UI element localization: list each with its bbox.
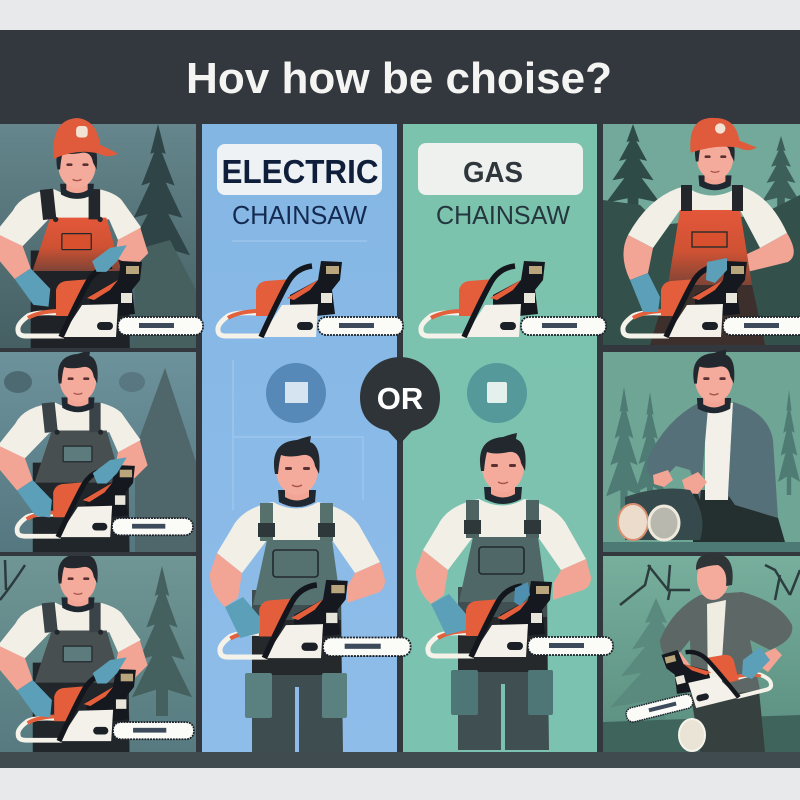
icon: chainsaw <box>220 580 411 658</box>
icon: bare branches <box>620 565 800 605</box>
worker figure <box>0 152 148 348</box>
icon: dark ground <box>603 715 800 752</box>
icon: chainsaw, left middle <box>17 465 193 537</box>
panel: man in sweater with chainsaw <box>603 553 800 752</box>
icon: bare branches <box>0 560 25 600</box>
label: gas: GAS <box>463 157 523 189</box>
panel: worker with cap, top left <box>0 118 196 348</box>
title: Hov how be choise? <box>186 54 612 103</box>
panel: electric column <box>202 124 397 752</box>
subheading: electric chainsaw: CHAINSAW <box>232 200 367 230</box>
faint guide lines: electric <box>232 241 367 510</box>
icon: background trees <box>606 387 800 512</box>
icon: chainsaw, flipped <box>614 630 772 725</box>
icon: gloves, top left worker <box>15 245 127 307</box>
icon: cap <box>53 118 118 159</box>
icon: gloves <box>225 597 260 638</box>
icon: dark ground <box>603 195 800 345</box>
panel: man in suit with logs <box>603 349 800 552</box>
icon: chainsaw, electric column <box>218 261 403 337</box>
icon: gloves, left bottom worker <box>17 657 127 717</box>
worker figure <box>0 556 148 752</box>
icon: chainsaw, top right <box>623 261 800 337</box>
icon: electric circle <box>266 363 326 423</box>
icon: background tree <box>132 566 192 716</box>
icon: chainsaw <box>428 581 613 657</box>
icon: lower background <box>135 240 196 348</box>
icon: logs <box>618 489 702 540</box>
icon: cap <box>690 118 757 153</box>
icon: stump <box>679 719 705 751</box>
icon: chainsaw, gas column <box>421 261 606 337</box>
panel: gas column <box>403 124 597 752</box>
icon: gas circle <box>467 363 527 423</box>
icon: background tree <box>126 124 190 274</box>
icon: chainsaw, top left <box>18 261 203 337</box>
icon: glove <box>742 647 770 679</box>
icon: gloves, left middle worker <box>17 457 127 517</box>
panel: worker with cap, top right <box>603 118 800 345</box>
panel: worker, left bottom <box>0 556 196 752</box>
icon: background tree <box>762 136 800 211</box>
label: gas <box>418 143 583 195</box>
panel: worker, left middle <box>0 352 196 552</box>
icon: background fir <box>610 598 702 723</box>
electric worker with chainsaw <box>210 436 411 753</box>
icon: chainsaw, left bottom <box>18 669 194 741</box>
worker figure <box>0 352 148 552</box>
worker figure <box>623 128 794 345</box>
icon: smudge <box>4 371 32 393</box>
icon: gloves <box>431 594 466 635</box>
man in sweater <box>660 553 792 752</box>
icon: smudge <box>119 372 145 392</box>
label: electric <box>217 144 382 195</box>
badge: OR <box>360 357 440 444</box>
subheading: gas chainsaw: CHAINSAW <box>436 200 570 230</box>
badge: OR: OR <box>377 381 423 416</box>
icon: gloves, top right worker <box>630 258 727 312</box>
icon: background tree <box>606 124 660 214</box>
bottom strip <box>0 752 800 768</box>
icon: background fir <box>135 368 196 552</box>
label: electric: ELECTRIC <box>222 153 378 190</box>
man in suit <box>647 349 785 542</box>
icon: right glove <box>514 582 530 606</box>
gas worker with chainsaw <box>416 433 613 750</box>
